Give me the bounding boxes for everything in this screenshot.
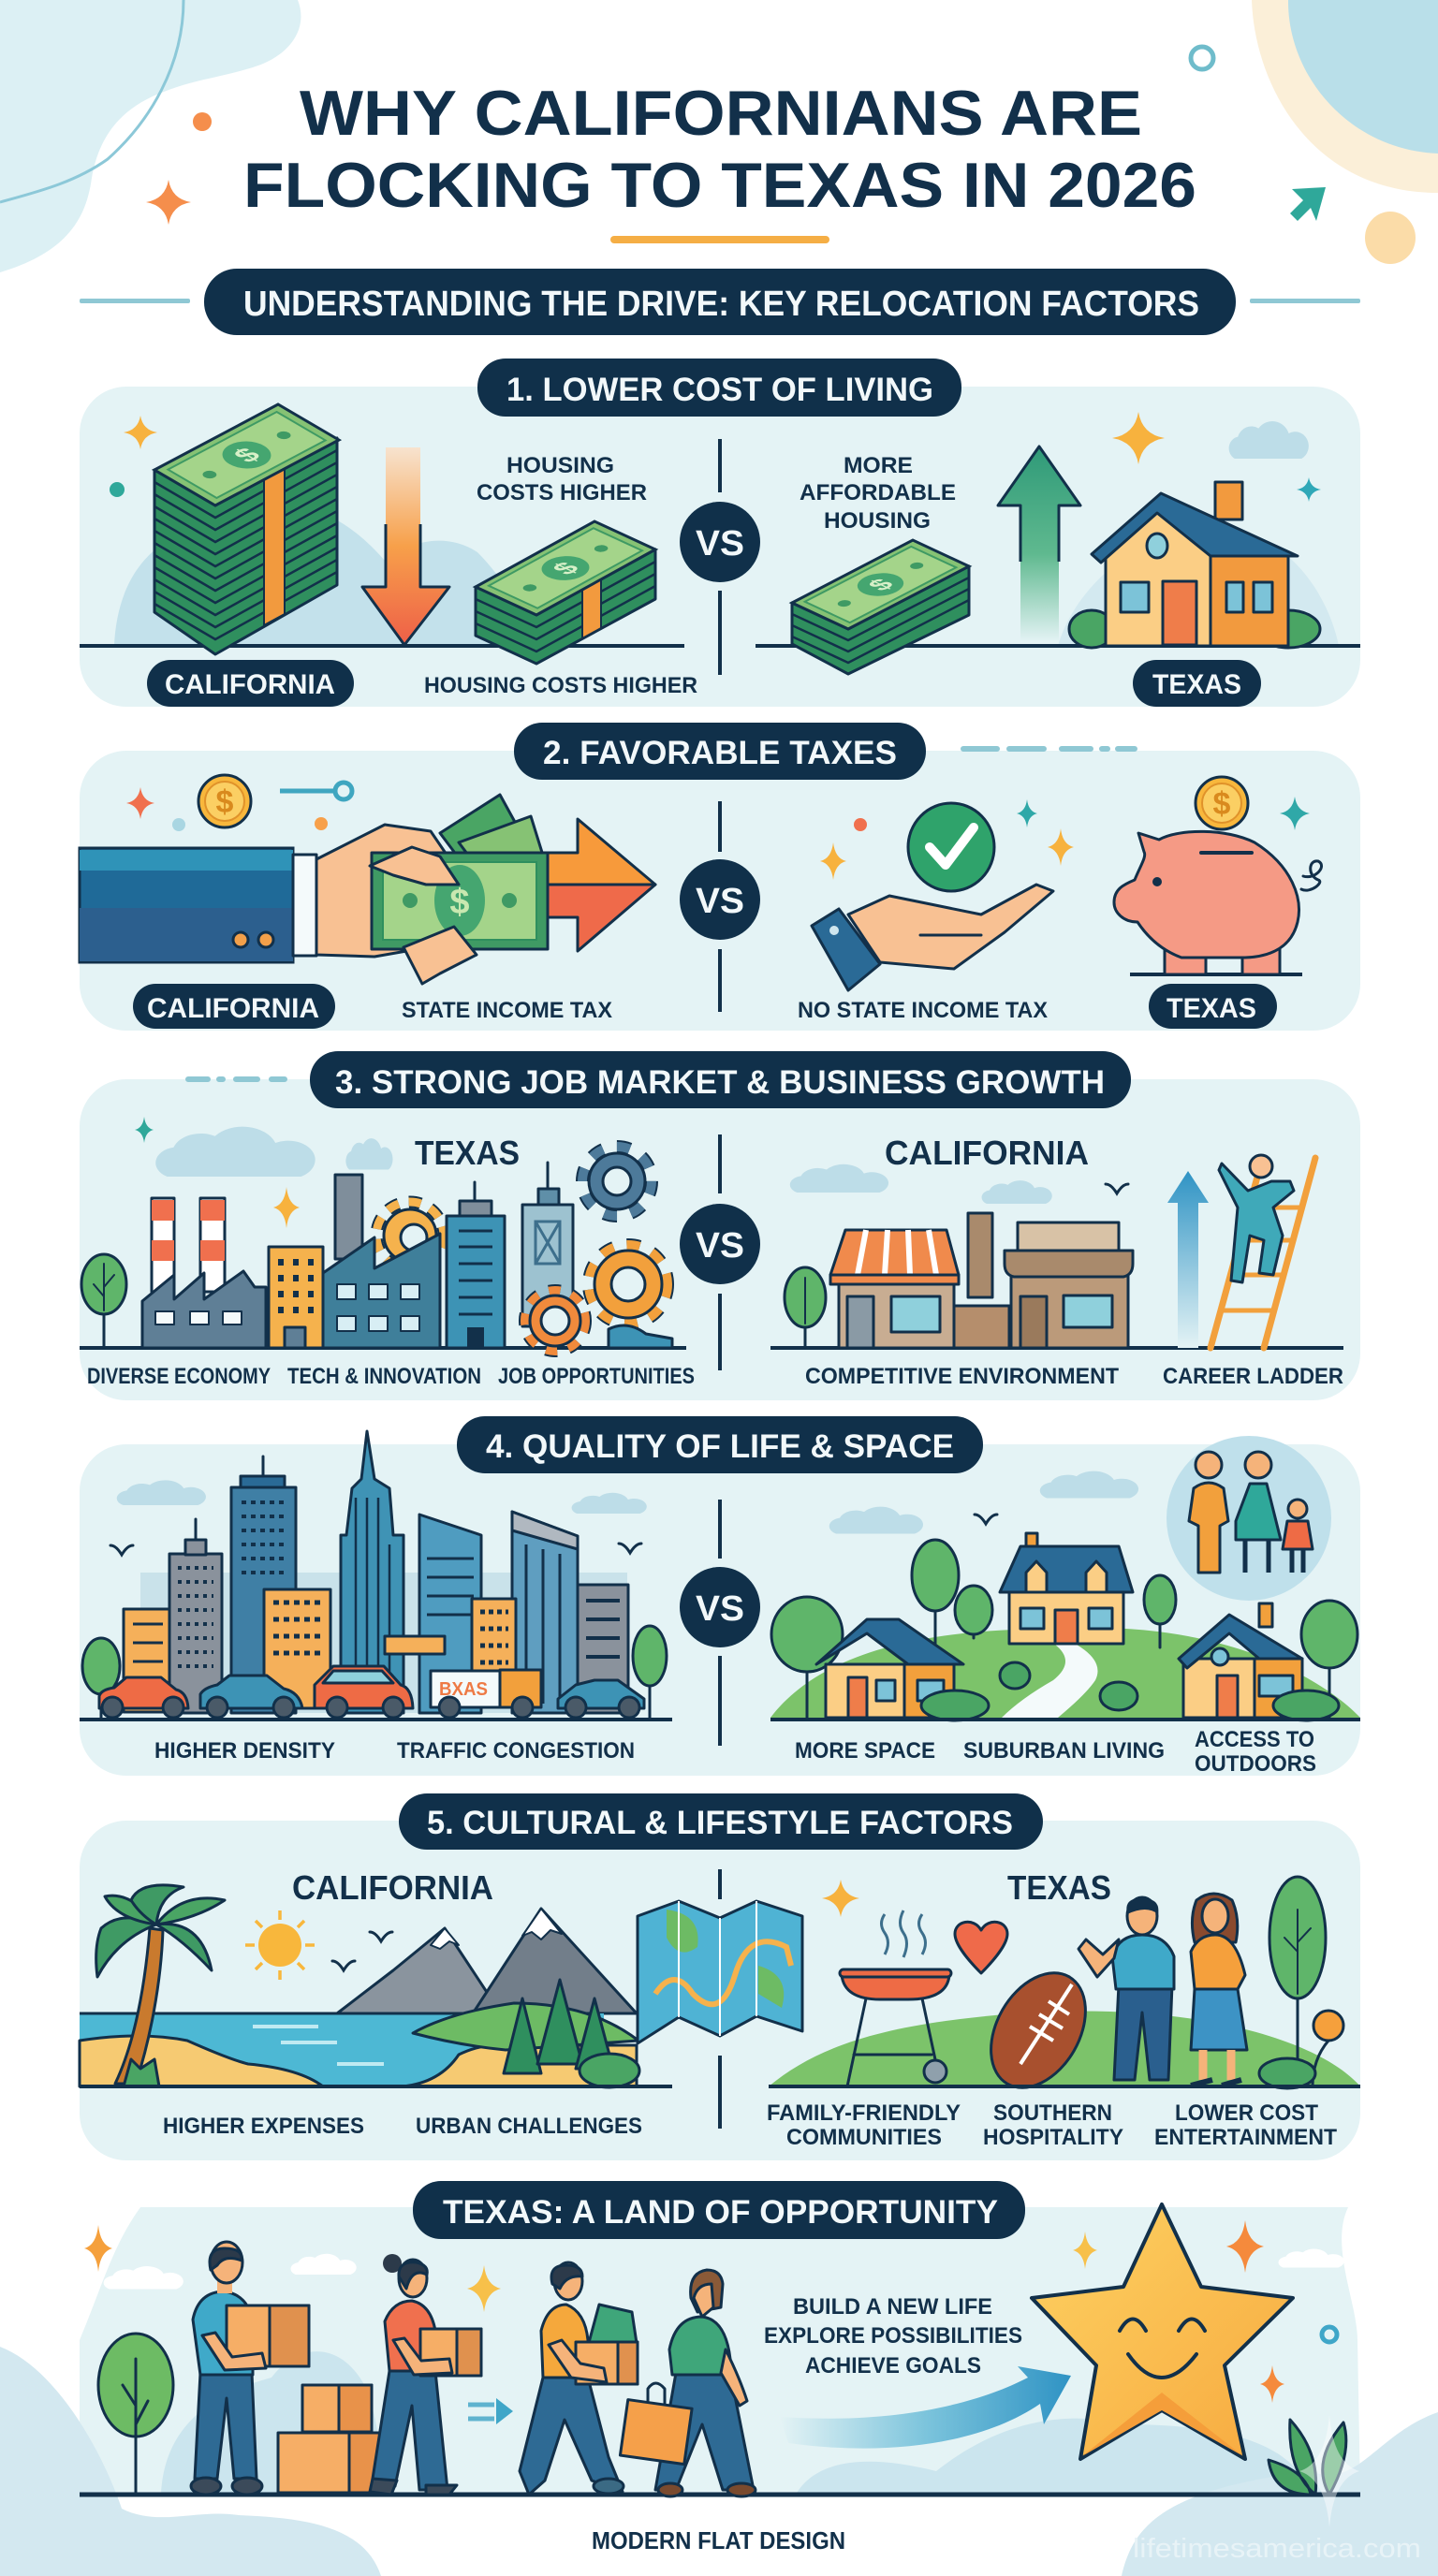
divider and VS badge: VS	[696, 882, 744, 921]
icon: sparkle	[822, 1880, 859, 1917]
label: no state income tax: NO STATE INCOME TAX	[798, 998, 1048, 1023]
label: access to outdoors: ACCESS TO	[1195, 1727, 1314, 1752]
heading pill 4	[457, 1416, 983, 1473]
icon: check mark	[908, 803, 994, 891]
illustration: sea and beach	[80, 2003, 638, 2086]
sparkles	[84, 2220, 1337, 2403]
ground line	[80, 2492, 1360, 2497]
illustration: right house	[1179, 1603, 1302, 1718]
bushes	[921, 1662, 1339, 1720]
heading: texas: TEXAS	[415, 1134, 520, 1172]
panel: 1 lower cost of living	[80, 359, 1360, 707]
banner: key relocation factors: UNDERSTANDING THE DRIVE: KEY RELOCATION FACTORS	[243, 285, 1199, 324]
label: california	[147, 660, 354, 707]
illustration: shop	[830, 1230, 959, 1348]
divider and VS badge	[680, 801, 760, 1012]
heading pill 4: 4. QUALITY OF LIFE & SPACE	[486, 1428, 954, 1465]
label: southern hospitality: SOUTHERN	[993, 2100, 1112, 2126]
icon: cash stack affordable: $	[861, 575, 901, 594]
illustration: woman	[1191, 1894, 1247, 2086]
heading pill 3: 3. STRONG JOB MARKET & BUSINESS GROWTH	[335, 1064, 1105, 1101]
icon: hand with cash	[316, 825, 548, 984]
label: access to outdoors	[1195, 1727, 1316, 1777]
illustration: traffic	[99, 1666, 644, 1718]
label: suburban living: SUBURBAN LIVING	[963, 1738, 1165, 1764]
illustration: factory	[142, 1198, 266, 1348]
heading pill 6	[413, 2181, 1025, 2239]
icon: open hand	[812, 885, 1053, 990]
icon: piggy bank: $	[1213, 786, 1231, 822]
decorative blob: top left	[0, 0, 301, 272]
heading pill 2: 2. FAVORABLE TAXES	[543, 735, 897, 771]
illustration: man with box	[191, 2242, 309, 2495]
title: FLOCKING TO TEXAS IN 2026	[243, 150, 1196, 221]
illustration: person on ladder	[1211, 1155, 1315, 1348]
heading pill 5: 5. CULTURAL & LIFESTYLE FACTORS	[427, 1805, 1013, 1841]
divider and VS badge	[680, 1134, 760, 1370]
text: housing costs higher: COSTS HIGHER	[477, 480, 647, 505]
title	[243, 78, 1196, 221]
white clouds	[104, 2248, 1344, 2290]
ground lines	[80, 1718, 1360, 1721]
label: texas: TEXAS	[1152, 669, 1241, 700]
icon: cash stack affordable	[792, 540, 969, 674]
clouds and sparkles	[135, 1117, 1128, 1228]
title: WHY CALIFORNIANS ARE	[300, 78, 1142, 149]
icon: orange gears	[525, 1245, 672, 1351]
arrow: curved blue to star	[780, 2366, 1071, 2449]
icon: small cash stack	[476, 521, 655, 664]
label: california: CALIFORNIA	[147, 993, 319, 1024]
label: family-friendly communities: COMMUNITIES	[786, 2125, 942, 2150]
text: more affordable housing: MORE	[844, 453, 913, 478]
panel: 4 quality of life	[80, 1416, 1360, 1777]
icon: house	[1069, 482, 1320, 648]
illustration: woman with bag	[620, 2270, 756, 2496]
text: build a new life list: BUILD A NEW LIFE	[793, 2294, 992, 2320]
panel: 2 favorable taxes	[80, 723, 1360, 1031]
text: housing costs higher	[477, 453, 647, 505]
icon: large cash stack: $	[227, 444, 268, 467]
panel: 3 job market	[80, 1051, 1360, 1400]
illustration: stacked boxes	[278, 2385, 389, 2493]
sparkles center right	[820, 797, 1310, 880]
icon: piggy bank	[1114, 777, 1322, 974]
label: texas	[1133, 660, 1261, 707]
label: family-friendly communities: FAMILY-FRIENDLY	[767, 2100, 961, 2126]
arrow: up green	[998, 446, 1080, 642]
label: diverse economy: DIVERSE ECONOMY	[87, 1364, 271, 1389]
text: build a new life list: ACHIEVE GOALS	[805, 2353, 981, 2378]
label: career ladder: CAREER LADDER	[1163, 1364, 1343, 1389]
icon: trees right	[771, 1540, 1357, 1718]
icon: trees	[82, 1626, 667, 1720]
illustration: brick building	[954, 1213, 1133, 1348]
heading pill 6: TEXAS: A LAND OF OPPORTUNITY	[443, 2194, 998, 2231]
small decorations left	[126, 775, 352, 831]
clouds and birds	[110, 1471, 1138, 1555]
divider and VS badge	[680, 1500, 760, 1746]
label: job opportunities: JOB OPPORTUNITIES	[498, 1364, 695, 1389]
illustration: chimney and yellow gear	[335, 1175, 444, 1269]
icon: fanned cash	[440, 795, 548, 880]
family circle	[1167, 1436, 1331, 1601]
panel: 5 cultural and lifestyle	[80, 1793, 1360, 2160]
divider and VS badge	[680, 439, 760, 675]
text: more affordable housing	[800, 453, 956, 534]
text: build a new life list	[764, 2294, 1022, 2378]
icon: heart	[955, 1922, 1007, 1973]
watermark: lifetimesamerica.com	[1133, 2534, 1421, 2564]
icon: orange sparkle	[146, 180, 191, 225]
label: california: CALIFORNIA	[165, 669, 335, 700]
title underline	[610, 236, 829, 243]
sparkles and dots	[110, 412, 1321, 502]
text: build a new life list: EXPLORE POSSIBILITIES	[764, 2323, 1022, 2349]
icon: sun	[245, 1910, 315, 1980]
ground lines	[80, 1346, 1343, 1350]
small decorations left: $	[216, 784, 234, 820]
label: southern hospitality: HOSPITALITY	[983, 2125, 1123, 2150]
banner: key relocation factors	[80, 269, 1360, 335]
label: lower cost entertainment: ENTERTAINMENT	[1154, 2125, 1337, 2150]
soft background shapes	[0, 2207, 1438, 2576]
label: lower cost entertainment: LOWER COST	[1175, 2100, 1318, 2126]
icons: birds	[332, 1932, 392, 1970]
label: southern hospitality	[983, 2100, 1123, 2150]
label: traffic congestion: TRAFFIC CONGESTION	[397, 1738, 635, 1764]
illustration: mountains	[337, 1909, 637, 2013]
heading pill 1: 1. LOWER COST OF LIVING	[506, 372, 933, 408]
heading pill 3	[310, 1051, 1131, 1108]
label: competitive environment: COMPETITIVE ENVIRONMENT	[805, 1364, 1119, 1389]
illustration: center house	[1000, 1533, 1133, 1644]
icon: tree	[785, 1267, 826, 1348]
label: lower cost entertainment	[1154, 2100, 1337, 2150]
illustration: second factory	[323, 1234, 440, 1348]
illustration: teal tower	[447, 1182, 505, 1348]
arrow: small blue	[468, 2398, 513, 2424]
divider and VS badge: VS	[696, 1226, 744, 1266]
label: urban challenges: URBAN CHALLENGES	[416, 2114, 642, 2139]
footer caption: MODERN FLAT DESIGN	[592, 2526, 845, 2554]
divider and VS badge: VS	[696, 524, 744, 564]
panel: texas a land of opportunity	[0, 2181, 1438, 2576]
arrow: down red	[362, 447, 449, 645]
icon: plant	[1269, 2415, 1359, 2527]
divider and VS badge: VS	[696, 1589, 744, 1629]
icon: sleeve	[80, 848, 316, 962]
icon: tree	[81, 1254, 126, 1348]
icon: small cash stack: $	[546, 559, 586, 578]
illustration: man with box of items	[520, 2262, 638, 2495]
heading: texas: TEXAS	[1007, 1868, 1111, 1907]
label: higher density: HIGHER DENSITY	[154, 1738, 335, 1764]
icon: teal arrow	[1290, 187, 1326, 221]
label: tech and innovation: TECH & INNOVATION	[287, 1364, 481, 1389]
label: more space: MORE SPACE	[795, 1738, 935, 1764]
heading pill 5	[399, 1793, 1043, 1850]
heading pill 1	[477, 359, 961, 417]
illustration: glass tower	[522, 1163, 573, 1326]
label: higher expenses: HIGHER EXPENSES	[163, 2114, 364, 2139]
icon: hand with cash: $	[449, 883, 470, 922]
label: state income tax: STATE INCOME TAX	[402, 998, 612, 1023]
text: more affordable housing: AFFORDABLE	[800, 480, 956, 505]
label: california	[133, 984, 335, 1029]
green hill	[769, 2011, 1360, 2086]
icon: smiling star	[1032, 2204, 1293, 2459]
heading: california: CALIFORNIA	[292, 1868, 493, 1907]
ground lines	[80, 2085, 1360, 2088]
icon: grill	[840, 1910, 951, 2086]
illustration: yellow building	[269, 1247, 323, 1348]
green hill and path	[770, 1628, 1360, 1718]
ground lines	[80, 644, 1360, 648]
label: family-friendly communities	[767, 2100, 961, 2150]
illustration: woman with box	[370, 2254, 481, 2495]
icon: football	[972, 1956, 1105, 2104]
icon: tree	[98, 2334, 173, 2495]
icon: tree and flower	[1259, 1877, 1343, 2088]
icon: map	[638, 1901, 802, 2043]
icon: palm tree	[96, 1885, 225, 2086]
icon: pine trees	[504, 1980, 639, 2087]
decorative circles: top right	[1191, 0, 1438, 264]
icon: blue gear	[582, 1147, 652, 1216]
heading pill 2	[514, 723, 926, 780]
illustration: traffic: BXAS	[439, 1679, 488, 1700]
label: texas	[1149, 984, 1277, 1029]
icon: large cash stack	[154, 404, 339, 654]
divider	[718, 1869, 722, 2129]
illustration: skyline	[124, 1431, 628, 1713]
label: texas: TEXAS	[1167, 993, 1256, 1024]
heading: california: CALIFORNIA	[885, 1134, 1089, 1172]
label: access to outdoors: OUTDOORS	[1195, 1751, 1316, 1777]
illustration: left house	[816, 1619, 963, 1718]
icon: orange dot	[193, 112, 212, 131]
arrow: orange right	[548, 819, 655, 951]
text: housing costs higher: HOUSING	[506, 453, 614, 478]
label: housing costs higher: HOUSING COSTS HIGHER	[424, 673, 697, 698]
illustration: man waving	[1078, 1897, 1174, 2080]
arrow: up blue	[1167, 1171, 1209, 1348]
text: more affordable housing: HOUSING	[824, 508, 931, 534]
